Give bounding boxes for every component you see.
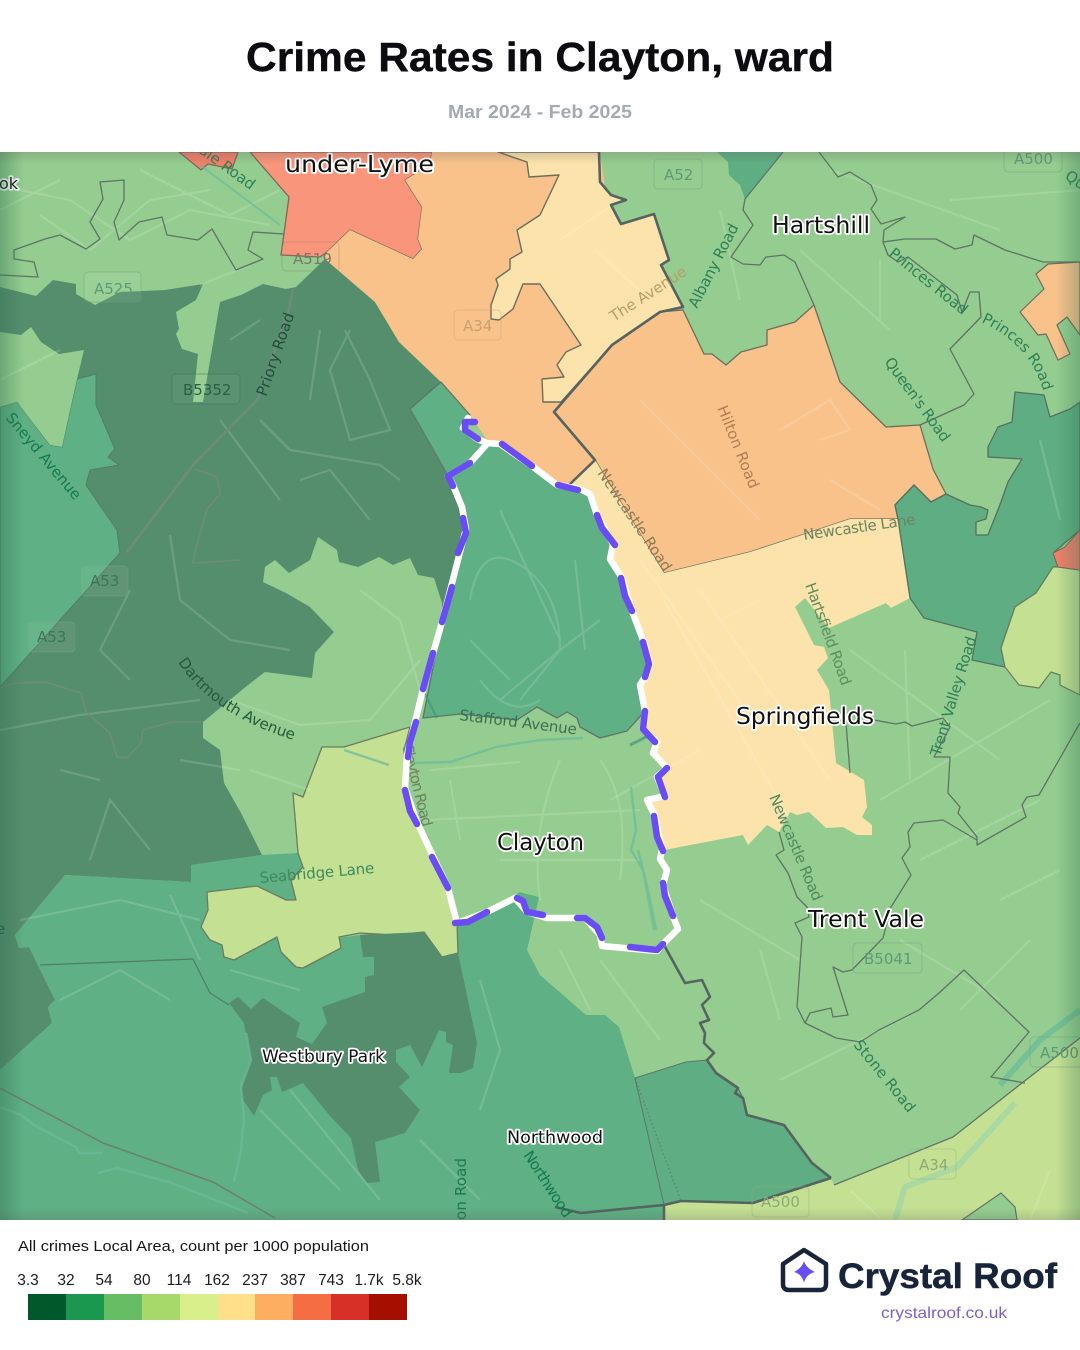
road shield B5352: B5352 bbox=[183, 381, 231, 399]
area: light green central west bbox=[203, 537, 442, 855]
area: pale green west of ward bbox=[201, 727, 458, 968]
road shield A53 lower bbox=[28, 622, 75, 652]
road shield B5041: B5041 bbox=[864, 950, 912, 968]
road label Princes Road north: Princes Road bbox=[885, 244, 971, 319]
road label Albany Road: Albany Road bbox=[685, 221, 742, 311]
road label Northwood: Northwood bbox=[520, 1147, 576, 1220]
legend value labels: 743 bbox=[318, 1272, 344, 1289]
area: light patch west bbox=[0, 327, 84, 447]
brand name: Crystal Roof bbox=[838, 1257, 1057, 1296]
road label Queens Road: Queen's Road bbox=[881, 354, 954, 445]
thin boundary lines bbox=[0, 152, 1080, 1218]
legend value labels: 114 bbox=[167, 1272, 192, 1289]
road shield A34 south bbox=[909, 1149, 956, 1179]
road shield A500 south: A500 bbox=[761, 1193, 800, 1211]
major boundary lines bbox=[554, 152, 831, 1220]
area: red far east bbox=[1053, 530, 1080, 570]
place labels bbox=[0, 152, 924, 1148]
place label Clayton: Clayton bbox=[497, 830, 584, 856]
road shield A500 north bbox=[1004, 140, 1062, 172]
legend value labels: 387 bbox=[280, 1272, 306, 1289]
road label Hilton Road: Hilton Road bbox=[713, 403, 763, 491]
legend colour bar bbox=[28, 1294, 407, 1320]
road label Dartmouth Avenue: Dartmouth Avenue bbox=[178, 657, 294, 740]
area: orange far east bbox=[1020, 262, 1080, 360]
road shield A53 upper bbox=[81, 566, 128, 596]
area: red under-Lyme bbox=[250, 152, 432, 259]
area: orange town centre bbox=[325, 152, 620, 485]
rivers and water bbox=[0, 165, 1080, 1220]
place label Springfields: Springfields bbox=[736, 704, 874, 730]
road shield A52: A52 bbox=[664, 166, 693, 184]
place label Westbury Park: Westbury Park bbox=[262, 1047, 385, 1067]
area: pale green far east bbox=[1001, 567, 1080, 695]
choropleth map bbox=[0, 152, 1080, 1220]
road shield A525: A525 bbox=[94, 280, 133, 298]
ward boundary white bbox=[405, 418, 678, 951]
road label Priory Road: Priory Road bbox=[253, 310, 298, 398]
road label Princes Road east: Princes Road bbox=[982, 312, 1054, 390]
map edge vignette bbox=[0, 152, 1080, 1220]
area: medium green east bbox=[895, 392, 1080, 667]
area: green pocket south edge bbox=[962, 1193, 1017, 1220]
area: medium green south east bbox=[635, 1060, 831, 1205]
road label Clayton Road: Clayton Road bbox=[398, 742, 436, 828]
legend value labels: 32 bbox=[57, 1272, 75, 1289]
logo bbox=[780, 1248, 1058, 1322]
area: medium green ward north bbox=[423, 443, 650, 738]
ward boundary purple dashes bbox=[405, 422, 673, 950]
road shield A500 east bbox=[1030, 1037, 1080, 1067]
website url: crystalroof.co.uk bbox=[881, 1305, 1008, 1322]
road shield A519 bbox=[282, 242, 339, 271]
area: dark green west bbox=[0, 259, 466, 1070]
road label Trent Valley Road: Trent Valley Road bbox=[926, 634, 980, 759]
road label Stafford Avenue: Stafford Avenue bbox=[459, 706, 578, 738]
road label Sneyd Avenue: Sneyd Avenue bbox=[2, 409, 85, 503]
road label Seabridge Lane: Seabridge Lane bbox=[259, 859, 375, 887]
legend value labels: 237 bbox=[242, 1272, 268, 1289]
road shield A52 bbox=[654, 159, 702, 189]
road shield A519: A519 bbox=[293, 250, 332, 268]
place label Trent Vale: Trent Vale bbox=[807, 907, 924, 933]
legend value labels: 162 bbox=[204, 1272, 230, 1289]
area: medium green north tip bbox=[410, 382, 487, 476]
legend scale bbox=[17, 1272, 422, 1320]
area: orange central bbox=[554, 305, 946, 573]
place label Northwood: Northwood bbox=[507, 1128, 603, 1148]
area: medium green far west bbox=[0, 374, 120, 687]
area: dark top bbox=[717, 152, 783, 199]
area: cream Springfields bbox=[569, 460, 910, 850]
road shield A53 upper: A53 bbox=[90, 572, 119, 590]
road label Newcastle Road north: Newcastle Road bbox=[594, 465, 676, 575]
legend value labels bbox=[17, 1272, 422, 1289]
area: dark green Westbury Park bbox=[229, 932, 477, 1183]
legend value labels: 5.8k bbox=[392, 1272, 422, 1289]
road shield A525 bbox=[84, 272, 141, 302]
road shield A500 south bbox=[752, 1187, 809, 1217]
legend title: All crimes Local Area, count per 1000 population bbox=[18, 1238, 369, 1255]
area: cream north bbox=[491, 152, 683, 402]
road shield A34 south: A34 bbox=[919, 1156, 948, 1174]
icon: house with star bbox=[783, 1250, 826, 1290]
legend value labels: 54 bbox=[95, 1272, 113, 1289]
road label Newcastle Road south: Newcastle Road bbox=[765, 792, 826, 904]
road label Hartsfield Road: Hartsfield Road bbox=[801, 580, 855, 688]
area: medium green south west bbox=[0, 853, 664, 1220]
subtitle: Mar 2024 - Feb 2025 bbox=[448, 102, 632, 122]
legend value labels: 1.7k bbox=[354, 1272, 384, 1289]
road shield A53 lower: A53 bbox=[37, 628, 66, 646]
road shield A34 north bbox=[454, 310, 501, 340]
place label Hartshill: Hartshill bbox=[772, 213, 870, 239]
road shield A500 east: A500 bbox=[1040, 1044, 1079, 1062]
road label The Avenue: The Avenue bbox=[606, 262, 690, 326]
road shield B5041 bbox=[853, 943, 922, 973]
road label on Road: on Road bbox=[452, 1158, 470, 1220]
road shield B5352 bbox=[172, 374, 240, 404]
road label Newcastle Lane: Newcastle Lane bbox=[802, 510, 916, 544]
place label under-Lyme: under-Lyme bbox=[285, 152, 434, 178]
legend value labels: 80 bbox=[133, 1272, 151, 1289]
area: red tip bbox=[179, 152, 238, 170]
area: pale south east bbox=[664, 1038, 1080, 1220]
legend value labels: 3.3 bbox=[17, 1272, 39, 1289]
area polygons bbox=[0, 152, 1080, 1220]
street network bbox=[0, 170, 1080, 1220]
road label Stone Road: Stone Road bbox=[850, 1036, 919, 1116]
title: Crime Rates in Clayton, ward bbox=[246, 34, 834, 80]
road shield A34 north: A34 bbox=[463, 317, 492, 335]
base layer light green bbox=[0, 152, 1080, 1220]
